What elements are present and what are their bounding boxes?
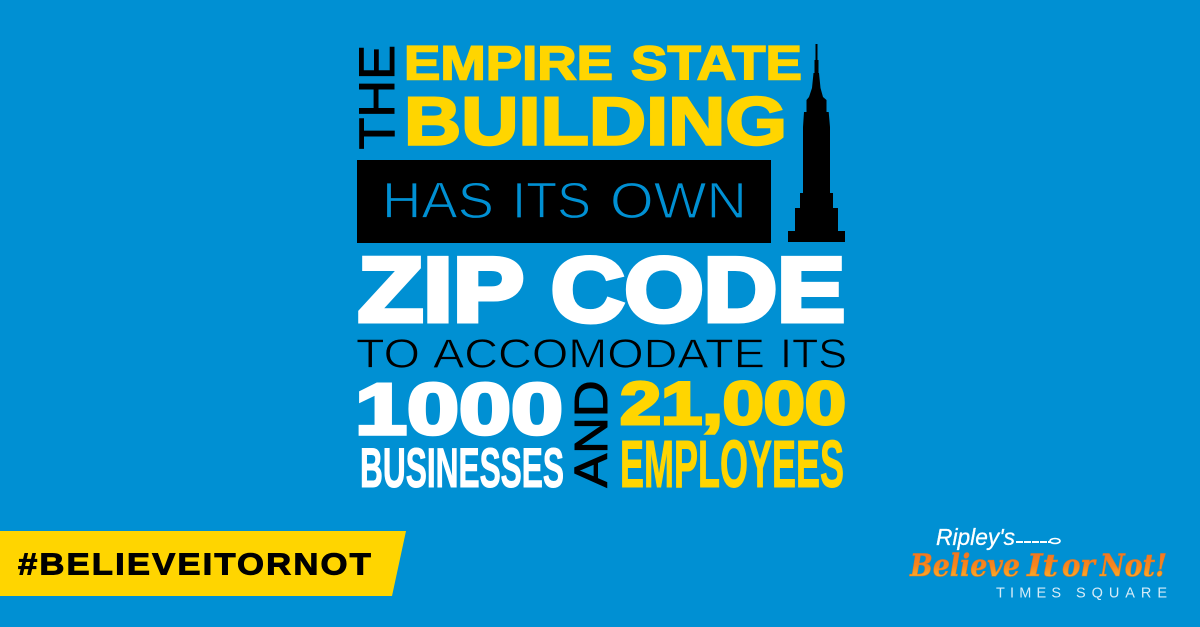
stat: 1000: 1000 xyxy=(355,370,563,450)
hashtag banner: #BELIEVEITORNOT xyxy=(18,546,371,581)
logo script: Ripley's: Ripley's xyxy=(936,524,1015,550)
stat: 21,000: 21,000 xyxy=(620,370,846,437)
banner: HAS ITS OWN xyxy=(357,160,771,243)
logo wordmark: Believe It or Not!: Not! xyxy=(1099,548,1167,584)
hashtag banner xyxy=(0,531,406,596)
heading: ZIP CODE: ZIP xyxy=(358,240,524,341)
text: TO ACCOMODATE ITS xyxy=(356,330,847,376)
logo wordmark: Believe It or Not!: or xyxy=(1062,548,1097,584)
vertical word: AND: AND xyxy=(565,380,617,488)
label: BUSINESSES: BUSINESSES xyxy=(360,436,564,499)
logo wordmark: Believe It or Not! xyxy=(909,548,1167,584)
logo: Ripley's Believe It or Not! Times Square xyxy=(909,524,1167,602)
text: TO ACCOMODATE ITS: ITS xyxy=(780,330,847,376)
icon: Empire State Building silhouette xyxy=(788,44,845,242)
heading: BUILDING: BUILDING xyxy=(404,84,787,160)
heading: EMPIRE STATE: EMPIRE xyxy=(404,38,613,90)
heading: ZIP CODE: CODE xyxy=(551,240,845,341)
text: TO ACCOMODATE ITS: ACCOMODATE xyxy=(433,330,765,376)
logo subtitle: TIMES SQUARE: TIMES xyxy=(996,586,1061,602)
banner: HAS ITS OWN: ITS xyxy=(512,172,591,229)
logo wordmark: Believe It or Not!: Believe xyxy=(909,548,1020,584)
text: TO ACCOMODATE ITS: TO xyxy=(356,330,420,376)
logo subtitle: TIMES SQUARE xyxy=(996,586,1167,602)
heading: ZIP CODE xyxy=(358,240,845,341)
label: EMPLOYEES: EMPLOYEES xyxy=(620,427,844,502)
heading: EMPIRE STATE xyxy=(404,38,802,90)
logo wordmark: Believe It or Not!: It xyxy=(1026,548,1059,584)
vertical word: THE: THE xyxy=(349,45,405,150)
banner: HAS ITS OWN: OWN xyxy=(610,172,747,229)
banner: HAS ITS OWN: HAS xyxy=(382,172,494,229)
logo chain xyxy=(1016,538,1060,544)
logo subtitle: TIMES SQUARE: SQUARE xyxy=(1076,586,1167,602)
heading: EMPIRE STATE: STATE xyxy=(631,38,802,90)
